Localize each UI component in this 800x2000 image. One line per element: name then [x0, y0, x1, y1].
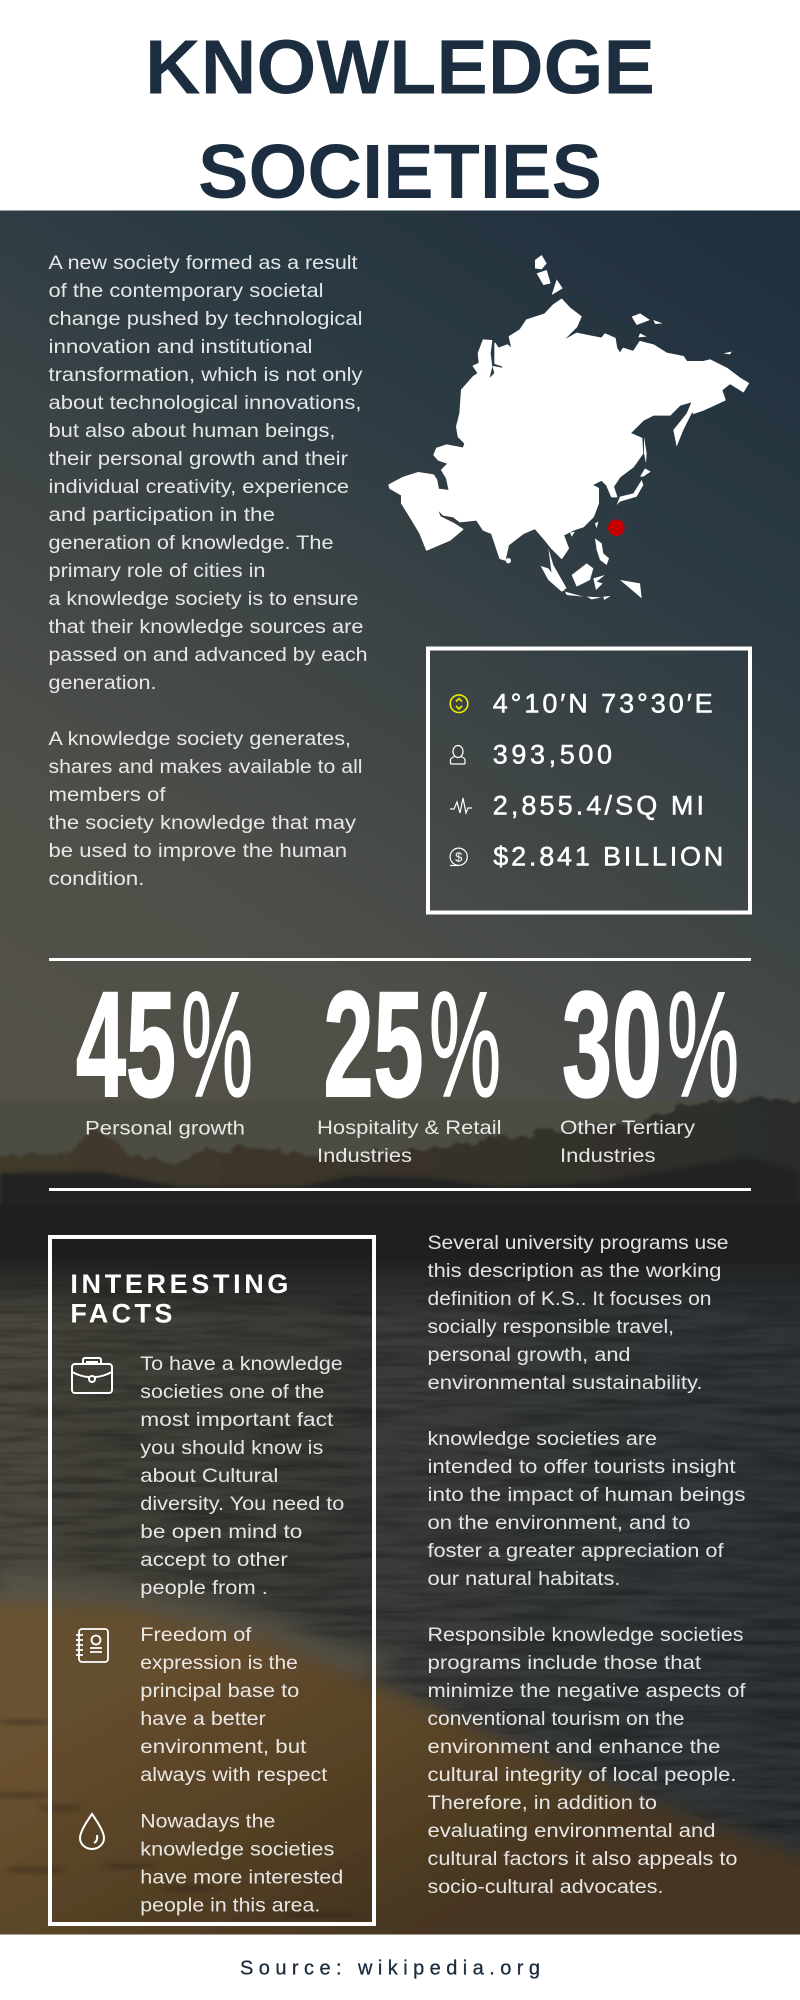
- right column text block: Therefore, in addition to: [428, 1793, 657, 1814]
- fact: interest in the area: [140, 1812, 343, 1916]
- heading: INTERESTING: [70, 1269, 288, 1299]
- intro text block: condition.: [48, 869, 144, 890]
- fact: cultural diversity: To have a knowledge: [140, 1354, 343, 1375]
- icon: water drop: [80, 1814, 104, 1849]
- fact: cultural diversity: diversity. You need to: [140, 1494, 344, 1515]
- heading: FACTS: [70, 1298, 172, 1328]
- fact: freedom of expression: [140, 1625, 328, 1786]
- right column text block: [428, 1233, 746, 1898]
- right column text block: on the environment, and to: [428, 1513, 690, 1534]
- panel: location statistics: [428, 648, 750, 912]
- fact: cultural diversity: about Cultural: [140, 1466, 278, 1487]
- fact: interest in the area: people in this area.: [140, 1896, 320, 1916]
- stat: 30% other tertiary: Industries: [560, 1146, 656, 1167]
- right column text block: Several university programs use: [428, 1233, 728, 1254]
- right column text block: socio-cultural advocates.: [428, 1877, 664, 1898]
- icon: notebook: [76, 1629, 108, 1662]
- density value: 2,855.4/SQ MI: [493, 790, 704, 820]
- fact: cultural diversity: most important fact: [140, 1410, 334, 1431]
- white header band: [0, 0, 800, 210]
- population value: 393,500: [493, 739, 612, 769]
- icon: pulse: [450, 798, 472, 813]
- right column text block: foster a greater appreciation of: [428, 1541, 724, 1562]
- intro text block: innovation and institutional: [48, 337, 312, 358]
- intro text block: A knowledge society generates,: [48, 729, 351, 750]
- fact: freedom of expression: principal base to: [140, 1681, 299, 1702]
- right column text block: evaluating environmental and: [428, 1821, 716, 1842]
- stat: 30% other tertiary: 30: [562, 960, 662, 1128]
- right column text block: this description as the working: [428, 1261, 722, 1282]
- fact: freedom of expression: Freedom of: [140, 1625, 252, 1646]
- coordinates value: 4°10′N 73°30′E: [493, 689, 713, 719]
- panel: interesting facts: [50, 1237, 374, 1924]
- intro text block: primary role of cities in: [48, 561, 266, 582]
- heading: [70, 1269, 288, 1328]
- title: KNOWLEDGE: [145, 24, 655, 110]
- title: [145, 24, 655, 215]
- fact: freedom of expression: always with respect: [140, 1765, 328, 1786]
- source footer: Source: wikipedia.org: [240, 1958, 540, 1980]
- intro text block: and participation in the: [48, 505, 275, 526]
- GDP value: $2.841 BILLION: [493, 842, 723, 872]
- intro text block: that their knowledge sources are: [48, 617, 364, 638]
- intro text block: but also about human beings,: [48, 421, 336, 442]
- fact: freedom of expression: expression is the: [140, 1653, 298, 1674]
- stat: 30% other tertiary: %: [667, 960, 739, 1128]
- right column text block: personal growth, and: [428, 1345, 630, 1366]
- icon: money bubble: $: [455, 850, 463, 864]
- icon: money bubble: [450, 848, 467, 866]
- right column text block: environmental sustainability.: [428, 1373, 702, 1394]
- intro text block: of the contemporary societal: [48, 281, 324, 302]
- map of Asia with red location marker: [389, 255, 748, 600]
- intro text block: shares and makes available to all: [48, 757, 362, 778]
- stat: 45% personal growth: %: [181, 960, 253, 1128]
- stat: 25% hospitality and retail: Industries: [317, 1146, 412, 1167]
- right column text block: environment and enhance the: [428, 1737, 720, 1758]
- intro text block: generation.: [48, 673, 156, 694]
- intro text block: individual creativity, experience: [48, 477, 349, 498]
- intro text block: the society knowledge that may: [48, 813, 357, 834]
- icon: briefcase: [72, 1358, 112, 1393]
- right column text block: cultural factors it also appeals to: [428, 1849, 738, 1870]
- right column text block: our natural habitats.: [428, 1569, 620, 1590]
- right column text block: minimize the negative aspects of: [428, 1681, 746, 1702]
- stat: 30% other tertiary: Other Tertiary: [560, 1118, 696, 1139]
- right column text block: intended to offer tourists insight: [428, 1457, 736, 1478]
- right column text block: programs include those that: [428, 1653, 702, 1674]
- fact: cultural diversity: [140, 1354, 344, 1599]
- right column text block: into the impact of human beings: [428, 1485, 746, 1506]
- stat: 45% personal growth: 45: [76, 960, 176, 1128]
- fact: cultural diversity: people from .: [140, 1578, 268, 1599]
- intro text block: passed on and advanced by each: [48, 645, 368, 666]
- fact: cultural diversity: accept to other: [140, 1550, 289, 1571]
- white footer band: [0, 1934, 800, 2000]
- fact: freedom of expression: environment, but: [140, 1737, 307, 1758]
- stat: 45% personal growth: Personal growth: [85, 1119, 245, 1140]
- stat: 25% hospitality and retail: 25: [324, 960, 424, 1128]
- intro text block: [48, 253, 368, 890]
- bottom divider: [49, 1188, 751, 1191]
- fact: cultural diversity: you should know is: [140, 1438, 323, 1459]
- top divider: [49, 958, 751, 961]
- intro text block: transformation, which is not only: [48, 365, 363, 386]
- fact: cultural diversity: be open mind to: [140, 1522, 302, 1543]
- fact: interest in the area: Nowadays the: [140, 1812, 275, 1832]
- icon: coordinates: [450, 695, 468, 712]
- title: SOCIETIES: [198, 129, 602, 215]
- intro text block: members of: [48, 785, 166, 806]
- right column text block: cultural integrity of local people.: [428, 1765, 736, 1786]
- intro text block: their personal growth and their: [48, 449, 349, 470]
- fact: interest in the area: have more interested: [140, 1868, 343, 1888]
- intro text block: about technological innovations,: [48, 393, 362, 414]
- fact: cultural diversity: societies one of the: [140, 1382, 324, 1403]
- stat: 25% hospitality and retail: Hospitality & Retail: [317, 1118, 502, 1139]
- intro text block: A new society formed as a result: [48, 253, 358, 274]
- right column text block: definition of K.S.. It focuses on: [428, 1289, 712, 1310]
- right column text block: socially responsible travel,: [428, 1317, 674, 1338]
- icon: person: [450, 746, 465, 764]
- fact: freedom of expression: have a better: [140, 1709, 267, 1730]
- intro text block: generation of knowledge. The: [48, 533, 334, 554]
- intro text block: a knowledge society is to ensure: [48, 589, 358, 610]
- stat: 25% hospitality and retail: %: [429, 960, 501, 1128]
- intro text block: be used to improve the human: [48, 841, 347, 862]
- right column text block: conventional tourism on the: [428, 1709, 684, 1730]
- intro text block: change pushed by technological: [48, 309, 362, 330]
- right column text block: knowledge societies are: [428, 1429, 657, 1450]
- fact: interest in the area: knowledge societies: [140, 1840, 334, 1860]
- right column text block: Responsible knowledge societies: [428, 1625, 744, 1646]
